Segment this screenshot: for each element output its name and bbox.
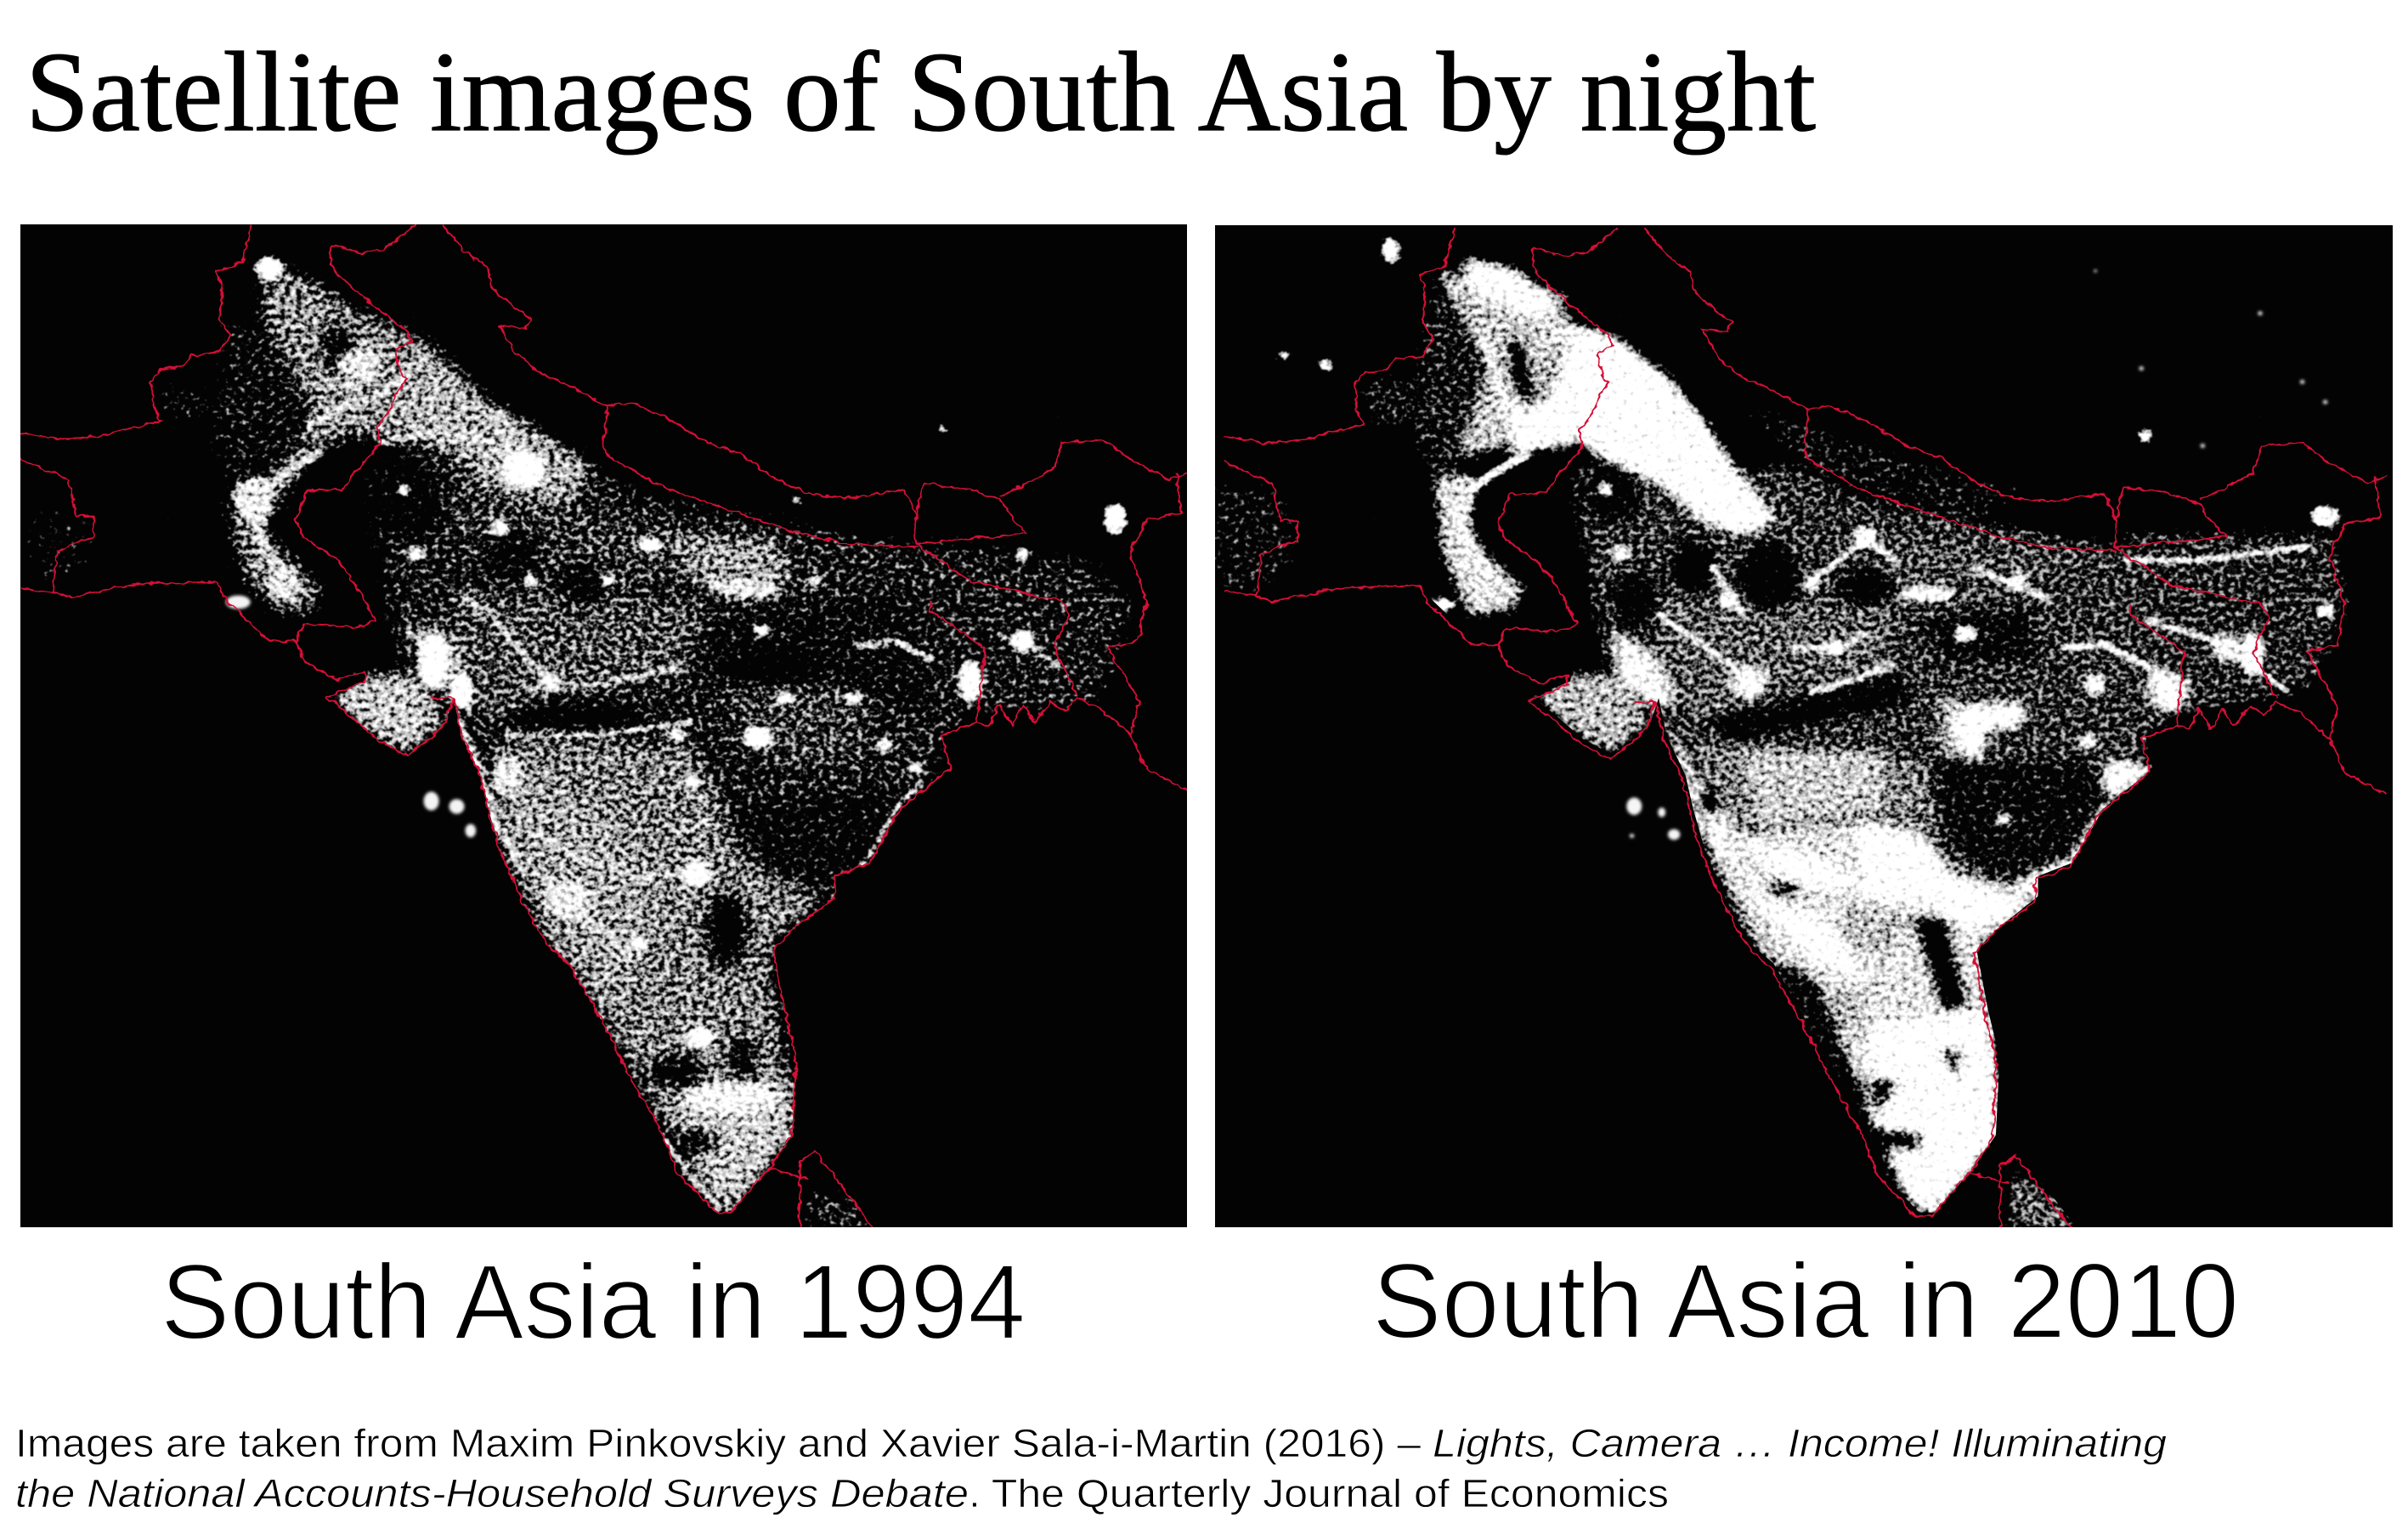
night lights 2010 [1215, 236, 2350, 1227]
national borders 1994 [20, 224, 1187, 1227]
city lights 2010 [1277, 237, 2341, 824]
panel: South Asia 2010 satellite map [1215, 225, 2393, 1227]
source note: . The Quarterly Journal of Economics [969, 1471, 1669, 1515]
caption: South Asia in 1994: South Asia in 1994 [161, 1243, 1026, 1362]
night lights 1994 [27, 254, 1132, 1227]
title: Satellite images of South Asia by night [25, 29, 1816, 155]
source note: the National Accounts-Household Surveys Debate [15, 1471, 969, 1515]
light corridors 1994 [257, 342, 1061, 1209]
city lights 1994 [235, 258, 1127, 1114]
light corridors 2010 [1460, 338, 2310, 691]
source note: Lights, Camera … Income! Illuminating [1433, 1421, 2167, 1465]
islands 1994 [226, 596, 476, 837]
islands and remote lights 2010 [1626, 269, 2327, 840]
source note: Images are taken from Maxim Pinkovskiy and Xavier Sala-i-Martin (2016) – [15, 1421, 1421, 1465]
source note [15, 1421, 2167, 1515]
caption: South Asia in 2010: South Asia in 2010 [1372, 1243, 2239, 1361]
panel: South Asia 1994 satellite map [20, 224, 1187, 1227]
national borders 2010 [1224, 228, 2386, 1231]
